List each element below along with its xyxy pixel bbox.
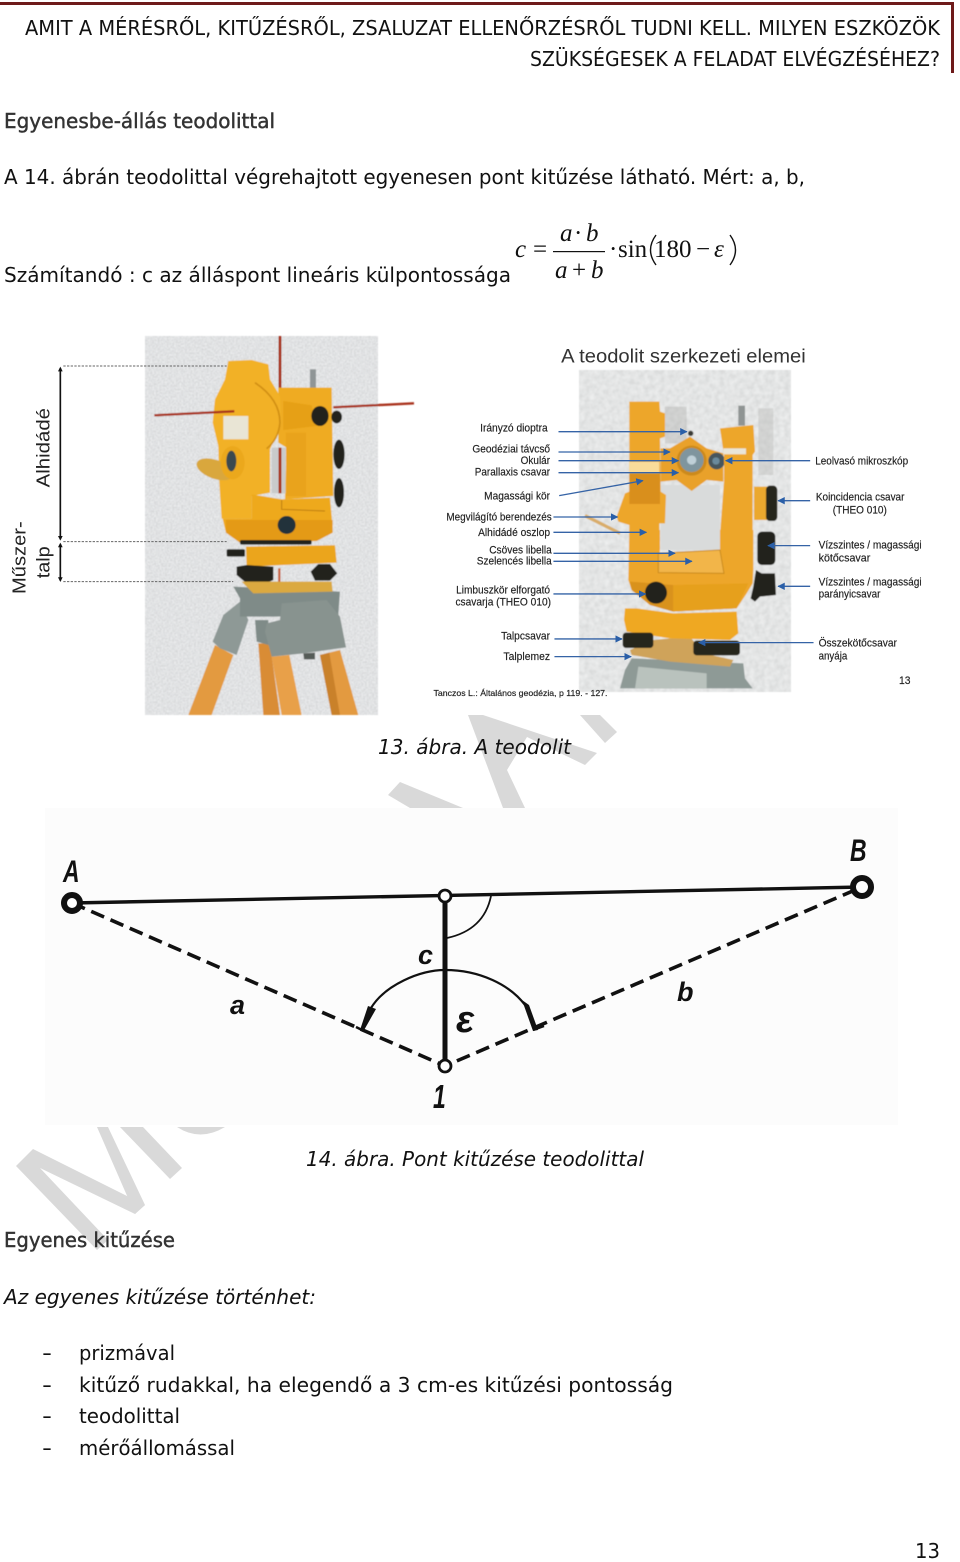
wall background bbox=[145, 336, 378, 715]
point labels: a bbox=[230, 990, 245, 1020]
dimension annotations bbox=[8, 366, 233, 594]
right labels: anyája bbox=[819, 650, 847, 662]
lower instrument and tripod bbox=[188, 564, 358, 715]
left labels bbox=[446, 423, 552, 663]
wall smudges bbox=[665, 407, 687, 443]
intro sentence: Az egyenes kitűzése történhet: bbox=[2, 1285, 316, 1309]
left labels: csavarja (THEO 010) bbox=[455, 596, 551, 608]
left labels: Talpcsavar bbox=[501, 631, 550, 643]
knobs bbox=[645, 532, 776, 604]
list of methods: teodolittal bbox=[79, 1404, 180, 1428]
points bbox=[64, 878, 871, 1072]
point labels bbox=[62, 833, 867, 1116]
caption: figure 14: 14. ábra. Pont kitűzése teodolittal bbox=[306, 1147, 644, 1171]
left labels: Megvilágító berendezés bbox=[446, 512, 552, 524]
right screw bbox=[693, 641, 740, 655]
tripod head bbox=[620, 658, 753, 688]
rod bbox=[310, 369, 316, 388]
point labels: A bbox=[62, 854, 80, 889]
list of methods: - bbox=[42, 1373, 52, 1397]
base plate bbox=[630, 637, 733, 667]
list of methods: kitűző rudakkal, ha elegendő a 3 cm-es kitűzési pontosság bbox=[79, 1373, 673, 1397]
text block: measured values: A 14. ábrán teodolittal végrehajtott egyenesen pont kitűzése látható. Mért: a, b, bbox=[4, 165, 805, 189]
right standard bbox=[278, 388, 333, 499]
formula: 180 bbox=[654, 236, 692, 263]
lower instrument bbox=[620, 530, 776, 688]
opening bbox=[661, 530, 720, 550]
left labels: Parallaxis csavar bbox=[475, 467, 550, 479]
right labels: (THEO 010) bbox=[833, 504, 887, 516]
point labels: c bbox=[418, 940, 433, 970]
formula: − bbox=[696, 236, 710, 263]
left labels: Talplemez bbox=[503, 651, 550, 663]
epsilon arc with arrows bbox=[356, 970, 544, 1032]
type plate bbox=[223, 416, 248, 439]
side knob bbox=[754, 487, 767, 520]
tribrach bbox=[246, 545, 337, 567]
red line below bbox=[276, 568, 283, 583]
upper instrument bbox=[154, 336, 414, 567]
wall background bbox=[579, 370, 791, 692]
right labels: Vízszintes / magassági bbox=[819, 539, 922, 551]
left labels: Irányzó dioptra bbox=[480, 423, 548, 435]
left screw bbox=[623, 633, 653, 648]
right labels: Koincidencia csavar bbox=[816, 492, 905, 504]
formula: b bbox=[586, 220, 598, 247]
header border bbox=[0, 4, 952, 73]
dotted guide lines bbox=[63, 366, 233, 582]
source note: Tanczos L.: Általános geodézia, p 119. - 127. bbox=[434, 689, 607, 698]
heading: Egyenes kitűzése: Egyenes kitűzése bbox=[4, 1228, 175, 1252]
watermark bbox=[16, 715, 617, 1250]
slide number: 13 bbox=[899, 675, 911, 687]
diagram background bbox=[45, 808, 898, 1125]
segment c bbox=[442, 896, 448, 1066]
list of methods: prizmával bbox=[79, 1341, 175, 1365]
figure title: A teodolit szerkezeti elemei bbox=[561, 346, 806, 368]
mirror bbox=[194, 454, 236, 485]
formula: a bbox=[555, 257, 568, 284]
tripod head bbox=[213, 587, 346, 659]
formula: = bbox=[533, 236, 547, 263]
formula: · bbox=[609, 236, 617, 263]
eyepiece and knobs bbox=[227, 406, 345, 557]
upper instrument bbox=[585, 402, 777, 535]
left standard bbox=[213, 360, 282, 519]
red axis lines bbox=[154, 403, 414, 415]
caption: figure 13: 13. ábra. A teodolit bbox=[378, 735, 572, 759]
body bbox=[628, 530, 753, 612]
list of methods: - bbox=[42, 1404, 52, 1428]
list of methods bbox=[42, 1341, 673, 1460]
rod bbox=[738, 406, 745, 426]
right labels: kötőcsavar bbox=[819, 552, 871, 564]
left labels: Geodéziai távcső bbox=[472, 443, 550, 455]
red plumb line bbox=[275, 336, 284, 389]
label: Műszer-: Műszer- bbox=[8, 521, 29, 594]
figure 13: left photo of the theodolite on tripod bbox=[145, 336, 414, 715]
formula: b bbox=[591, 257, 604, 284]
right labels bbox=[815, 455, 922, 662]
heading: Egyenesbe-állás teodolittal: Egyenesbe-állás teodolittal bbox=[4, 109, 275, 133]
figure 13: labels of the structural elements bbox=[434, 346, 922, 698]
formula: c bbox=[515, 236, 526, 263]
right labels: Leolvasó mikroszkóp bbox=[815, 455, 908, 467]
tripod legs bbox=[258, 643, 280, 715]
telescope bbox=[283, 401, 317, 430]
formula: a bbox=[560, 220, 572, 247]
point labels: b bbox=[677, 977, 694, 1007]
list of methods: mérőállomással bbox=[79, 1436, 235, 1460]
text block: computed value: Számítandó : c az álláspont lineáris külpontossága bbox=[4, 263, 511, 287]
right-angle arc bbox=[447, 896, 491, 938]
right standard bbox=[720, 425, 755, 535]
lower body bbox=[223, 494, 333, 543]
right labels: Vízszintes / magassági bbox=[819, 577, 922, 589]
list of methods: - bbox=[42, 1341, 52, 1365]
mirror strip bbox=[585, 516, 620, 533]
left labels: Szelencés libella bbox=[477, 556, 552, 568]
point labels: ε bbox=[456, 999, 475, 1041]
dioptra bbox=[688, 431, 693, 436]
point labels: 1 bbox=[433, 1079, 446, 1116]
formula: + bbox=[572, 257, 586, 284]
point labels: B bbox=[850, 833, 867, 868]
list of methods: - bbox=[42, 1436, 52, 1460]
tribrach bbox=[624, 608, 738, 640]
left labels: Limbuszkör elforgató bbox=[456, 584, 550, 596]
left labels: Okulár bbox=[521, 455, 550, 467]
dashed sides a and b bbox=[72, 887, 862, 1066]
left labels: Magassági kör bbox=[484, 490, 550, 502]
left standard bbox=[617, 402, 666, 535]
arrows bbox=[58, 367, 63, 582]
levelling screws bbox=[237, 564, 337, 586]
formula: ε bbox=[714, 236, 724, 263]
line AB bbox=[72, 887, 862, 903]
page header bbox=[0, 4, 952, 73]
left labels: Csöves libella bbox=[489, 544, 552, 556]
figure 13: right photo of the theodolite bbox=[579, 370, 791, 692]
formula: sin bbox=[618, 236, 648, 263]
formula bbox=[515, 220, 736, 284]
label: Alhidádé: Alhidádé bbox=[32, 408, 53, 487]
telescope star bbox=[661, 437, 723, 491]
right labels: Összekötőcsavar bbox=[819, 637, 897, 649]
base plate bbox=[242, 582, 333, 593]
opening bbox=[272, 448, 286, 493]
label: talp: talp bbox=[32, 546, 53, 578]
right labels: parányicsavar bbox=[819, 589, 881, 601]
formula: · bbox=[574, 220, 582, 247]
figure 14: point setting-out diagram bbox=[45, 808, 898, 1125]
label arrows bbox=[553, 432, 814, 657]
left labels: Alhidádé oszlop bbox=[478, 527, 550, 539]
